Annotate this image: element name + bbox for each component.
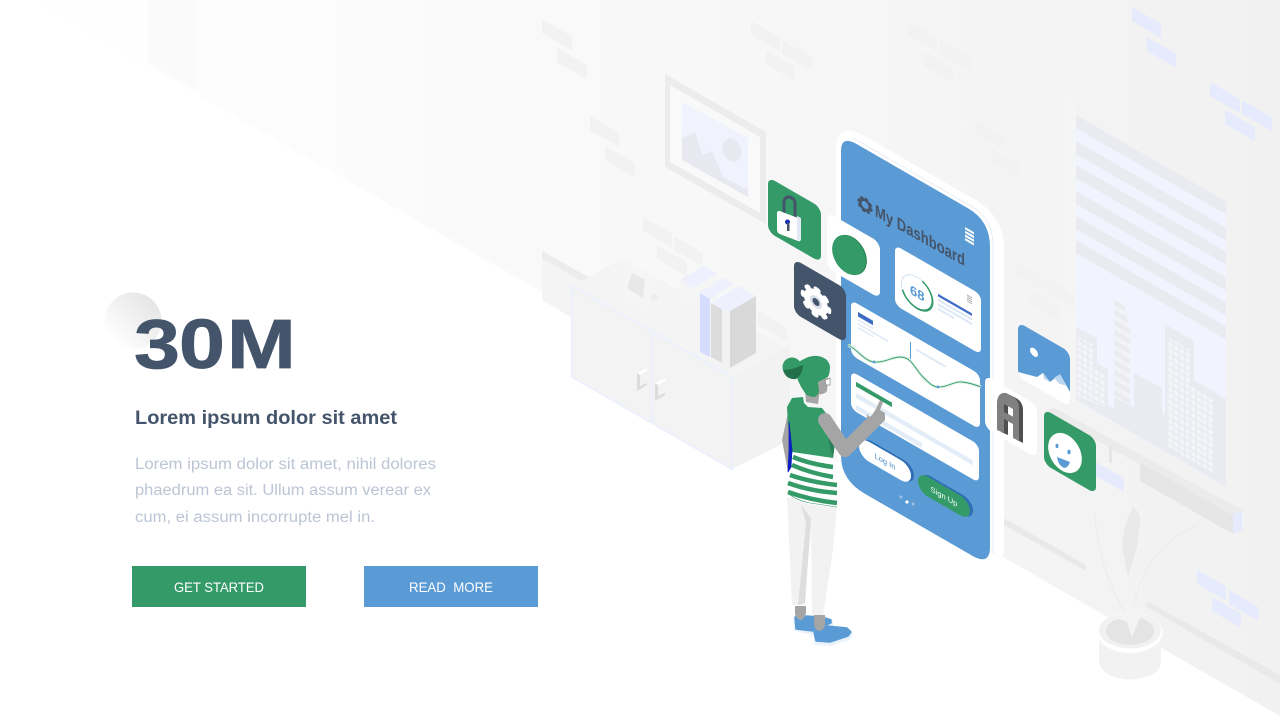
dashboard title xyxy=(858,195,965,270)
sign up button xyxy=(918,469,973,523)
body text: Lorem ipsum dolor sit amet, nihil dolores xyxy=(135,456,436,473)
button: get started: GET STARTED xyxy=(174,579,264,595)
wall bricks blue xyxy=(1096,7,1272,628)
hair xyxy=(782,356,830,397)
button: read more: READ MORE xyxy=(409,579,493,595)
body text xyxy=(135,456,436,526)
button: get started xyxy=(132,566,306,607)
potted plant xyxy=(1095,507,1197,680)
trousers xyxy=(787,497,837,616)
laptop on cabinet xyxy=(622,259,659,311)
phone xyxy=(836,120,1004,571)
pointing arm xyxy=(825,400,885,450)
icon: image tile xyxy=(1018,322,1070,407)
form card xyxy=(851,371,979,483)
shirt xyxy=(787,397,837,507)
login button: Log In xyxy=(875,452,895,472)
cabinet handles xyxy=(637,368,666,401)
button: read more xyxy=(364,566,538,607)
wall picture frame xyxy=(665,74,766,224)
gauge card xyxy=(895,245,981,355)
phone screen xyxy=(841,135,990,566)
icon: smile tile xyxy=(1041,409,1096,494)
gauge card: 68 xyxy=(910,282,925,305)
dashboard title: My Dashboard xyxy=(875,200,965,270)
icon: lock tile xyxy=(768,177,821,263)
left content xyxy=(104,292,538,607)
icon: gear tile xyxy=(794,259,846,343)
body text: phaedrum ea sit. Ullum assum verear ex xyxy=(135,482,431,499)
wall shelf xyxy=(1044,407,1242,534)
skirting boards xyxy=(542,251,1280,684)
login button xyxy=(859,434,914,488)
window with city skyline xyxy=(1076,115,1226,488)
neck and face xyxy=(805,378,830,404)
ankles and shoes xyxy=(794,606,852,645)
person xyxy=(782,356,885,645)
subheading: Lorem ipsum dolor sit amet xyxy=(135,408,398,429)
cabinet xyxy=(572,259,790,469)
pagination dots xyxy=(900,496,914,506)
big number: 30M xyxy=(134,306,296,384)
phone frame inner line xyxy=(853,138,993,554)
books xyxy=(680,266,756,368)
wall bricks grey xyxy=(542,19,1075,342)
body text: cum, ei assum incorrupte mel in. xyxy=(135,509,375,526)
icon: letter A tile xyxy=(985,375,1037,458)
sign up button: Sign Up xyxy=(931,485,958,509)
left arm xyxy=(782,413,792,472)
icon: green circle tile xyxy=(825,212,880,299)
bag strap xyxy=(788,422,792,472)
line chart card xyxy=(848,300,981,429)
menu icon xyxy=(965,227,974,245)
decorative circle xyxy=(104,292,162,350)
phone frame xyxy=(836,120,1004,571)
